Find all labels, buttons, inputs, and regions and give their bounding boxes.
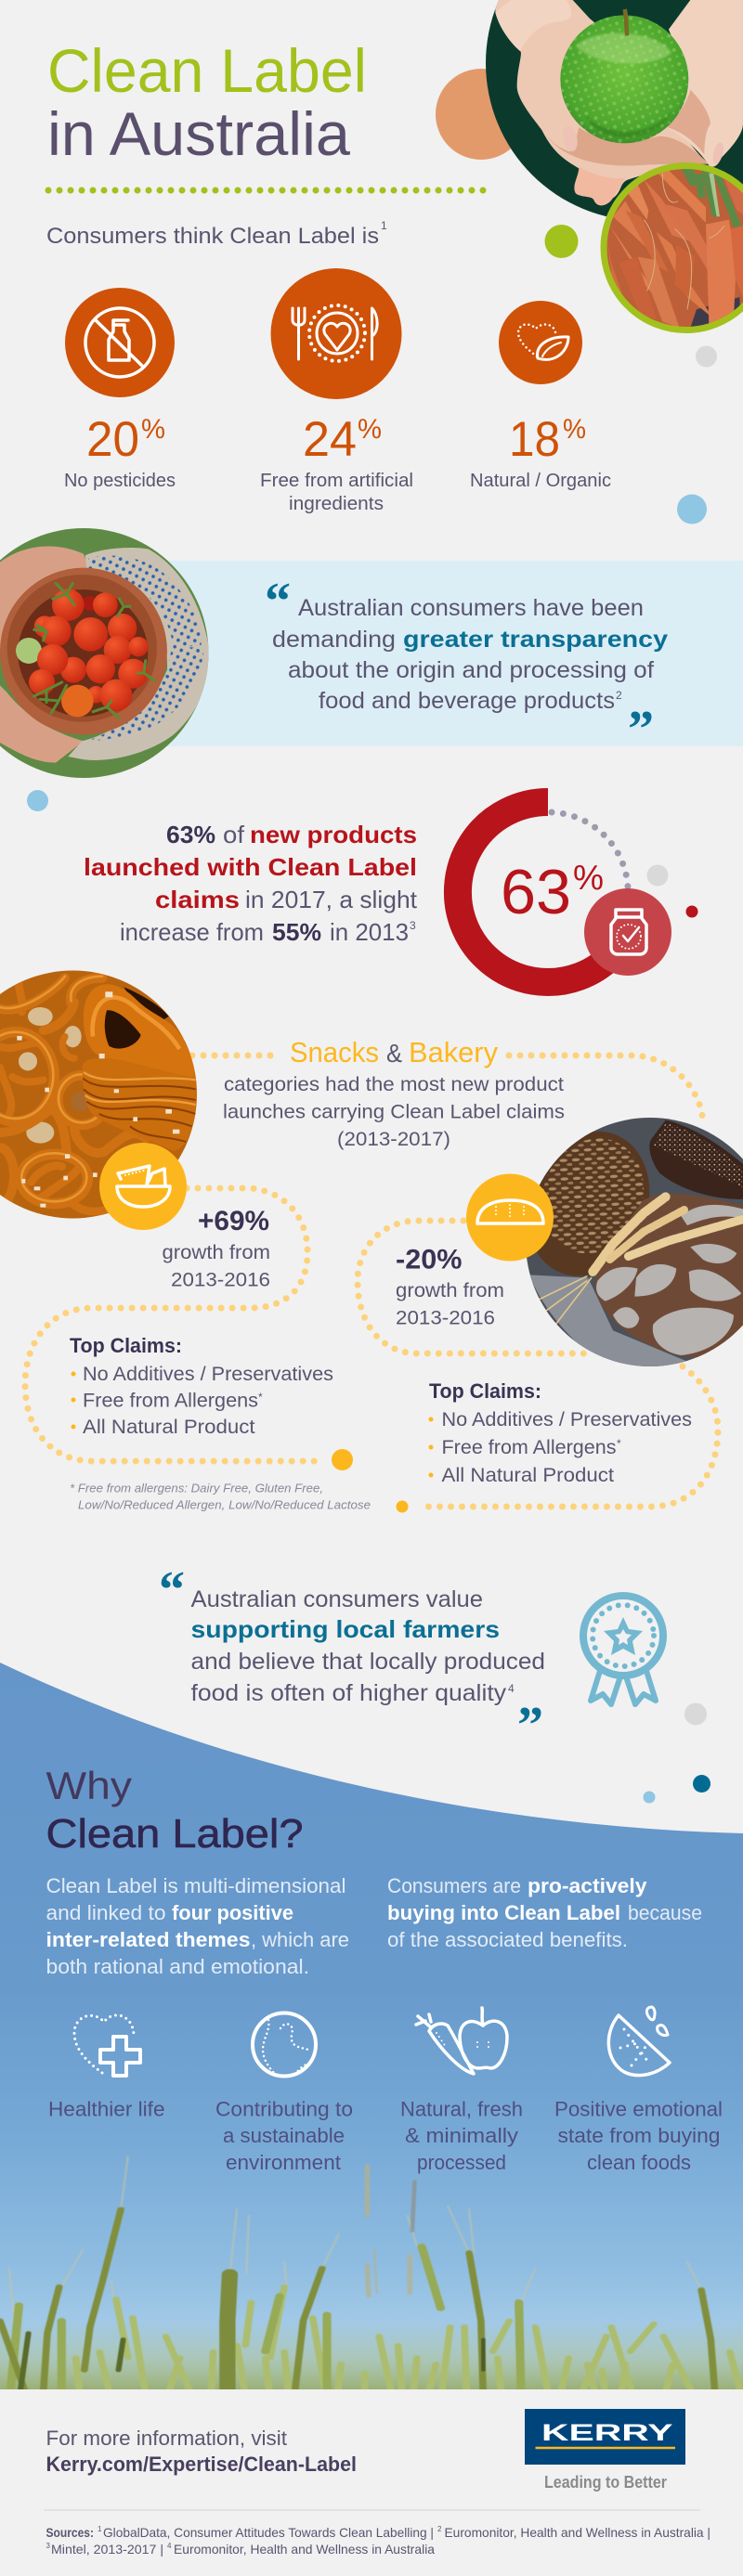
heading: why clean label: [46, 1764, 303, 1857]
text: four positive themes: and linked to: [46, 1901, 165, 1924]
sources: 3: [46, 2542, 50, 2550]
text: four positive themes: Clean Label is multi-dimensional: [46, 1874, 345, 1897]
text: four positive themes: , which are: [251, 1928, 349, 1951]
heading: snacks and bakery: (2013-2017): [337, 1129, 450, 1150]
photo: carrots: [597, 161, 743, 334]
panel: transparency quote: “: [265, 573, 291, 630]
logo: Kerry: KERRY: [541, 2420, 673, 2446]
heading: snacks and bakery: categories had the most new product: [224, 1074, 564, 1095]
footnote: Low/No/Reduced Allergen, Low/No/Reduced Lactose: [78, 1498, 371, 1511]
list: snacks top claims: All Natural Product: [83, 1417, 255, 1438]
stat: no pesticides: No pesticides: [64, 471, 176, 491]
subheading: consumers think: Consumers think Clean Label is: [46, 224, 379, 249]
benefit: natural fresh: & minimally: [405, 2124, 518, 2147]
sources: Mintel, 2013-2017 |: [51, 2542, 163, 2557]
sources: 4: [167, 2542, 172, 2550]
title: [47, 36, 367, 168]
benefit: sustainable environment: environment: [226, 2151, 341, 2174]
photo: wheat field: [0, 2156, 743, 2401]
stat: snacks growth: growth from: [162, 1242, 270, 1263]
text: four positive themes: four positive: [172, 1901, 293, 1924]
panel: local farmers quote: ”: [517, 1697, 543, 1754]
photo: hands holding green apple: [483, 0, 743, 223]
benefit: healthier life: Healthier life: [48, 2098, 165, 2120]
stat: bakery growth: 2013-2016: [396, 1307, 495, 1329]
icon: carrot and apple: [416, 2008, 507, 2074]
text: pro-actively buying: of the associated benefits.: [387, 1928, 628, 1951]
panel: transparency quote: demanding: [272, 627, 396, 653]
stat: free from artificial ingredients: [260, 268, 413, 514]
stat: natural / organic: Natural / Organic: [470, 471, 611, 491]
text: four positive themes: [46, 1874, 349, 1978]
logo: Kerry: Leading to Better: [544, 2473, 667, 2492]
stat: natural / organic: [470, 301, 611, 491]
heading: why clean label: Clean Label?: [46, 1811, 303, 1857]
benefit: sustainable environment: Contributing to: [215, 2098, 353, 2120]
title: Clean Label: [47, 36, 367, 105]
heading: snacks and bakery: [223, 1036, 565, 1150]
stat: snacks growth: +69%: [198, 1206, 269, 1236]
benefit: natural fresh: processed: [417, 2151, 506, 2174]
icon: heart with cross: [74, 2015, 140, 2076]
panel: local farmers quote: [159, 1561, 545, 1754]
text: 63% of new products: 63%: [166, 821, 215, 848]
text: 63% of new products: of: [223, 821, 245, 848]
text: four positive themes: both rational and emotional.: [46, 1955, 309, 1978]
footnote: [70, 1482, 371, 1511]
sources: 1: [98, 2525, 102, 2533]
list: snacks top claims: [70, 1334, 333, 1438]
logo: Kerry: [525, 2409, 685, 2492]
text: pro-actively buying: [387, 1874, 702, 1951]
panel: why clean label sky: [0, 1663, 743, 2401]
photo: bread loaves: [527, 1118, 743, 1366]
text: 63% of new products: claims: [155, 886, 240, 913]
icon: globe: [253, 2013, 316, 2076]
panel: transparency quote: greater transparency: [403, 627, 668, 653]
list: snacks top claims: Free from Allergens: [83, 1391, 258, 1411]
stat: no pesticides: %: [141, 414, 165, 445]
benefit: positive emotional state: [554, 2007, 723, 2174]
list: bakery top claims: No Additives / Preservatives: [442, 1409, 692, 1430]
stat: free from artificial ingredients: 24: [303, 412, 357, 467]
benefit: healthier life: [48, 2015, 165, 2120]
footer background: [0, 2389, 743, 2576]
decorative dots top: [544, 225, 717, 524]
stat: no pesticides: [64, 288, 176, 491]
photo: pretzels: [0, 965, 204, 1225]
text: 63% of new products: 3: [410, 919, 416, 932]
panel: local farmers quote: and believe that locally produced: [191, 1649, 545, 1675]
decorative peach circle: [436, 69, 527, 160]
panel: transparency quote: Australian consumers have been: [298, 595, 644, 621]
decorative dots above sky: [643, 1702, 710, 1803]
benefit: positive emotional state: Positive emotional: [554, 2098, 723, 2120]
stat: snacks growth: 2013-2016: [171, 1270, 270, 1290]
list: bakery top claims: Top Claims:: [429, 1379, 541, 1403]
sources: Euromonitor, Health and Wellness in Australia: [174, 2542, 435, 2557]
panel: local farmers quote: “: [159, 1561, 185, 1619]
decorative blue dot: [27, 790, 48, 811]
photo: bowl of tomatoes: [0, 524, 216, 784]
heading: snacks and bakery: launches carrying Clean Label claims: [223, 1101, 565, 1123]
chart: 63% donut: 63: [501, 857, 571, 927]
icon: crossed-out spray bottle: [65, 288, 175, 397]
text: 63% of new products: in 2017, a slight: [245, 886, 418, 913]
icon: snack bowl: [99, 1143, 187, 1230]
dotted connectors: [25, 1055, 718, 1513]
benefit: natural fresh: [400, 2008, 523, 2174]
panel: local farmers quote: food is often of higher quality: [191, 1680, 507, 1706]
sources: [46, 2525, 710, 2557]
panel: local farmers quote: Australian consumers value: [191, 1586, 483, 1612]
stat: natural / organic: 18: [509, 412, 560, 467]
panel: transparency quote: [139, 561, 743, 758]
chart: 63% donut: %: [573, 859, 604, 898]
panel: transparency quote: about the origin and processing of: [288, 657, 654, 683]
text: 63% of new products: new products: [250, 821, 417, 848]
panel: local farmers quote: 4: [508, 1682, 515, 1695]
stat: snacks growth: [162, 1206, 270, 1290]
text: 63% of new products: launched with Clean Label: [84, 853, 417, 881]
sources: Sources:: [46, 2525, 94, 2540]
panel: transparency quote: ”: [628, 701, 654, 758]
heading: snacks and bakery: &: [386, 1039, 402, 1068]
text: pro-actively buying: because: [628, 1901, 702, 1924]
stat: free from artificial ingredients: ingredients: [289, 494, 384, 514]
sources: GlobalData, Consumer Attitudes Towards Clean Labelling |: [103, 2525, 434, 2540]
icon: award ribbon: [583, 1596, 663, 1704]
list: snacks top claims: *: [258, 1391, 263, 1404]
stat: free from artificial ingredients: %: [358, 414, 382, 445]
heading: snacks and bakery: Snacks: [290, 1036, 379, 1068]
stat: bakery growth: -20%: [396, 1244, 463, 1275]
list: bakery top claims: [429, 1379, 692, 1486]
title: in Australia: [47, 99, 350, 168]
call to action: Kerry.com/Expertise/Clean-Label: [46, 2453, 357, 2476]
call to action: [46, 2427, 357, 2476]
text: 63% of new products: increase from: [120, 918, 264, 946]
chart: 63% donut: [458, 802, 671, 982]
panel: transparency quote: 2: [616, 689, 622, 702]
icon: jar with check: [584, 888, 671, 976]
text: 63% of new products: [84, 821, 418, 946]
benefit: sustainable environment: [215, 2013, 353, 2174]
text: pro-actively buying: pro-actively: [528, 1874, 647, 1897]
stat: bakery growth: growth from: [396, 1280, 504, 1301]
text: pro-actively buying: buying into Clean Label: [387, 1901, 620, 1924]
list: bakery top claims: Free from Allergens: [442, 1437, 617, 1458]
stat: no pesticides: 20: [86, 412, 139, 467]
sources: 2: [437, 2525, 442, 2533]
panel: transparency quote: food and beverage products: [319, 688, 615, 714]
icon: heart and leaf: [499, 301, 582, 384]
icon: bread loaf: [466, 1173, 554, 1261]
list: snacks top claims: Top Claims:: [70, 1334, 182, 1357]
text: 63% of new products: 55%: [272, 918, 321, 946]
benefit: sustainable environment: a sustainable: [223, 2124, 345, 2147]
heading: why clean label: Why: [46, 1764, 132, 1807]
panel: local farmers quote: supporting local farmers: [191, 1615, 500, 1643]
sources: Euromonitor, Health and Wellness in Australia |: [444, 2525, 710, 2540]
stat: bakery growth: [396, 1244, 504, 1329]
text: 63% of new products: in 2013: [330, 918, 409, 946]
icon: watermelon slice: [608, 2007, 670, 2076]
benefit: positive emotional state: state from buying: [557, 2124, 721, 2147]
benefit: positive emotional state: clean foods: [587, 2151, 691, 2174]
icon: plate with heart: [271, 268, 401, 399]
footnote: * Free from allergens: Dairy Free, Gluten Free,: [70, 1482, 323, 1495]
call to action: For more information, visit: [46, 2427, 287, 2450]
text: pro-actively buying: Consumers are: [387, 1874, 521, 1897]
subheading: consumers think: 1: [381, 219, 387, 232]
icon: green apple: [560, 9, 688, 143]
list: bakery top claims: All Natural Product: [442, 1465, 614, 1486]
stat: free from artificial ingredients: Free from artificial: [260, 471, 413, 491]
heading: snacks and bakery: Bakery: [409, 1036, 498, 1068]
text: four positive themes: inter-related themes: [46, 1928, 251, 1951]
benefit: natural fresh: Natural, fresh: [400, 2098, 523, 2120]
decorative dots around donut: [646, 865, 698, 917]
stat: natural / organic: %: [563, 414, 586, 445]
list: bakery top claims: *: [617, 1437, 621, 1450]
list: snacks top claims: No Additives / Preservatives: [83, 1364, 333, 1385]
